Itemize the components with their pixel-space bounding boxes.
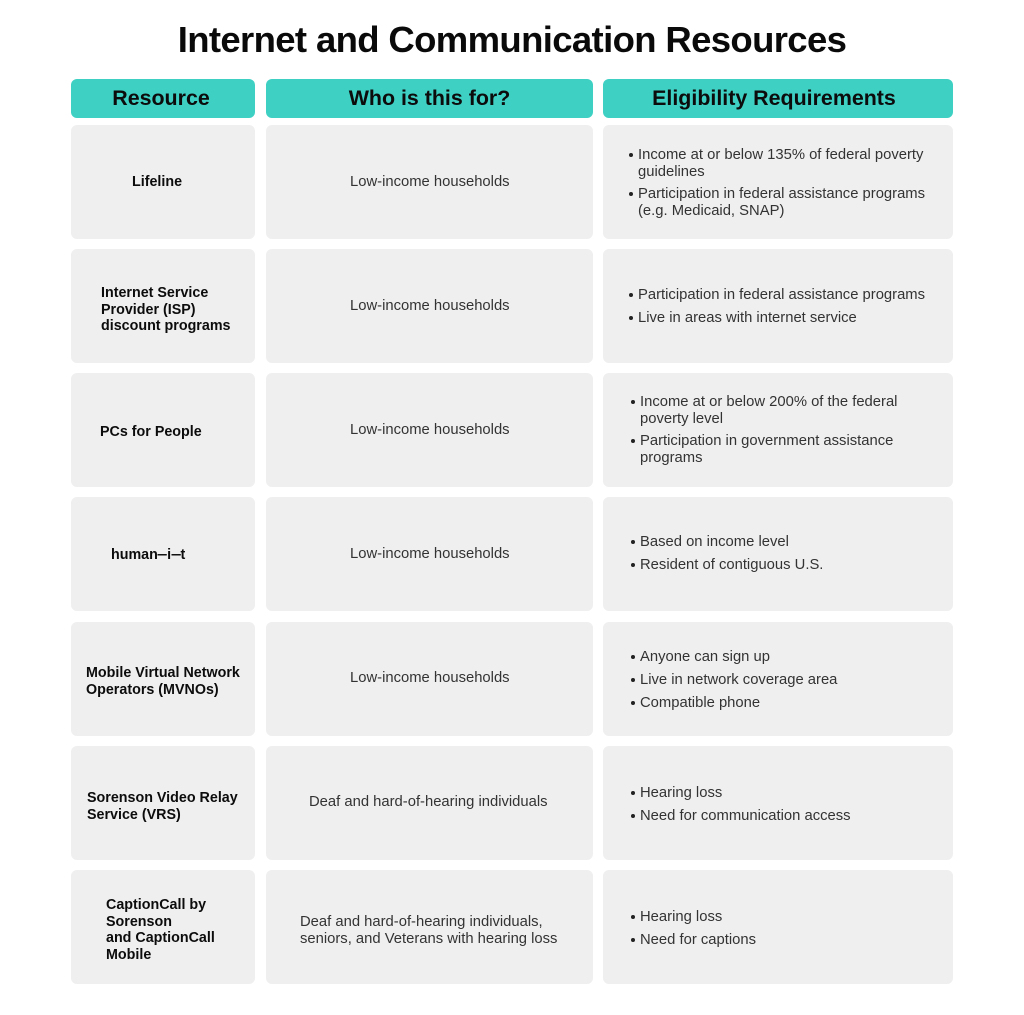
row: PCs for People — [71, 373, 953, 487]
audience cell: seniors, and Veterans with hearing loss — [300, 931, 557, 947]
resource cell — [71, 870, 255, 984]
row: Sorenson VRS — [71, 746, 953, 860]
audience cell — [266, 249, 593, 363]
eligibility cell: Resident of contiguous U.S. — [640, 557, 823, 573]
resource cell — [71, 249, 255, 363]
audience cell: Low-income households — [350, 422, 510, 438]
row: ISP discount programs — [71, 249, 953, 363]
eligibility cell — [603, 746, 953, 860]
eligibility cell: Income at or below 200% of the federal — [640, 394, 897, 410]
eligibility cell: Income at or below 135% of federal poverty — [638, 147, 923, 163]
eligibility cell: guidelines — [638, 164, 705, 180]
resource cell: Sorenson — [106, 914, 172, 930]
eligibility cell — [603, 125, 953, 239]
eligibility cell: Participation in government assistance — [640, 433, 893, 449]
eligibility cell: Hearing loss — [640, 785, 722, 801]
eligibility cell: Participation in federal assistance programs — [638, 287, 925, 303]
row: CaptionCall — [71, 870, 953, 984]
eligibility cell: poverty level — [640, 411, 723, 427]
resource cell: — — [158, 547, 167, 563]
eligibility cell: (e.g. Medicaid, SNAP) — [638, 203, 784, 219]
row: human-i-t — [71, 497, 953, 611]
audience cell: Deaf and hard-of-hearing individuals — [309, 794, 548, 810]
audience cell — [266, 746, 593, 860]
eligibility cell — [603, 249, 953, 363]
eligibility cell: Live in areas with internet service — [638, 310, 857, 326]
resource cell: Mobile Virtual Network — [86, 665, 240, 681]
header: Who is this for?: Who is this for? — [349, 86, 510, 110]
resource cell — [71, 746, 255, 860]
eligibility cell: Anyone can sign up — [640, 649, 770, 665]
eligibility cell: Compatible phone — [640, 695, 760, 711]
resource cell: Provider (ISP) — [101, 302, 196, 318]
row: MVNOs — [71, 622, 953, 736]
resource cell: discount programs — [101, 318, 230, 334]
audience cell: Low-income households — [350, 546, 510, 562]
title: Internet and Communication Resources — [178, 19, 846, 60]
eligibility cell: Need for communication access — [640, 808, 851, 824]
eligibility cell — [603, 497, 953, 611]
eligibility cell — [603, 373, 953, 487]
audience cell — [266, 497, 593, 611]
audience cell — [266, 870, 593, 984]
audience cell: Deaf and hard-of-hearing individuals, — [300, 914, 543, 930]
resource cell — [71, 125, 255, 239]
resource cell — [71, 622, 255, 736]
resource cell: and CaptionCall — [106, 930, 215, 946]
eligibility cell: programs — [640, 450, 702, 466]
audience cell: Low-income households — [350, 174, 510, 190]
eligibility cell: Based on income level — [640, 534, 789, 550]
eligibility cell — [603, 870, 953, 984]
audience cell — [266, 125, 593, 239]
header: Resource — [71, 79, 255, 118]
resource cell — [71, 497, 255, 611]
eligibility cell: Hearing loss — [640, 909, 722, 925]
resource cell: Lifeline — [132, 174, 182, 190]
eligibility cell: Need for captions — [640, 932, 756, 948]
header: Resource: Resource — [112, 86, 210, 110]
header: Who is this for? — [266, 79, 593, 118]
audience cell: Low-income households — [350, 670, 510, 686]
audience cell: Low-income households — [350, 298, 510, 314]
resource cell: Internet Service — [101, 285, 208, 301]
header: Eligibility Requirements: Eligibility Requirements — [652, 86, 896, 110]
resource cell — [71, 373, 255, 487]
eligibility cell: Live in network coverage area — [640, 672, 837, 688]
resource cell: human i t — [111, 547, 185, 563]
audience cell — [266, 622, 593, 736]
eligibility cell: Participation in federal assistance programs — [638, 186, 925, 202]
resource cell: PCs for People — [100, 424, 202, 440]
resource cell: CaptionCall by — [106, 897, 206, 913]
resource cell: — — [171, 547, 180, 563]
audience cell — [266, 373, 593, 487]
resource cell: Operators (MVNOs) — [86, 682, 219, 698]
eligibility cell — [603, 622, 953, 736]
resource cell: Sorenson Video Relay — [87, 790, 238, 806]
resource cell: Mobile — [106, 946, 151, 962]
row: Lifeline — [71, 125, 953, 239]
header: Eligibility Requirements — [603, 79, 953, 118]
resource cell: Service (VRS) — [87, 806, 181, 822]
